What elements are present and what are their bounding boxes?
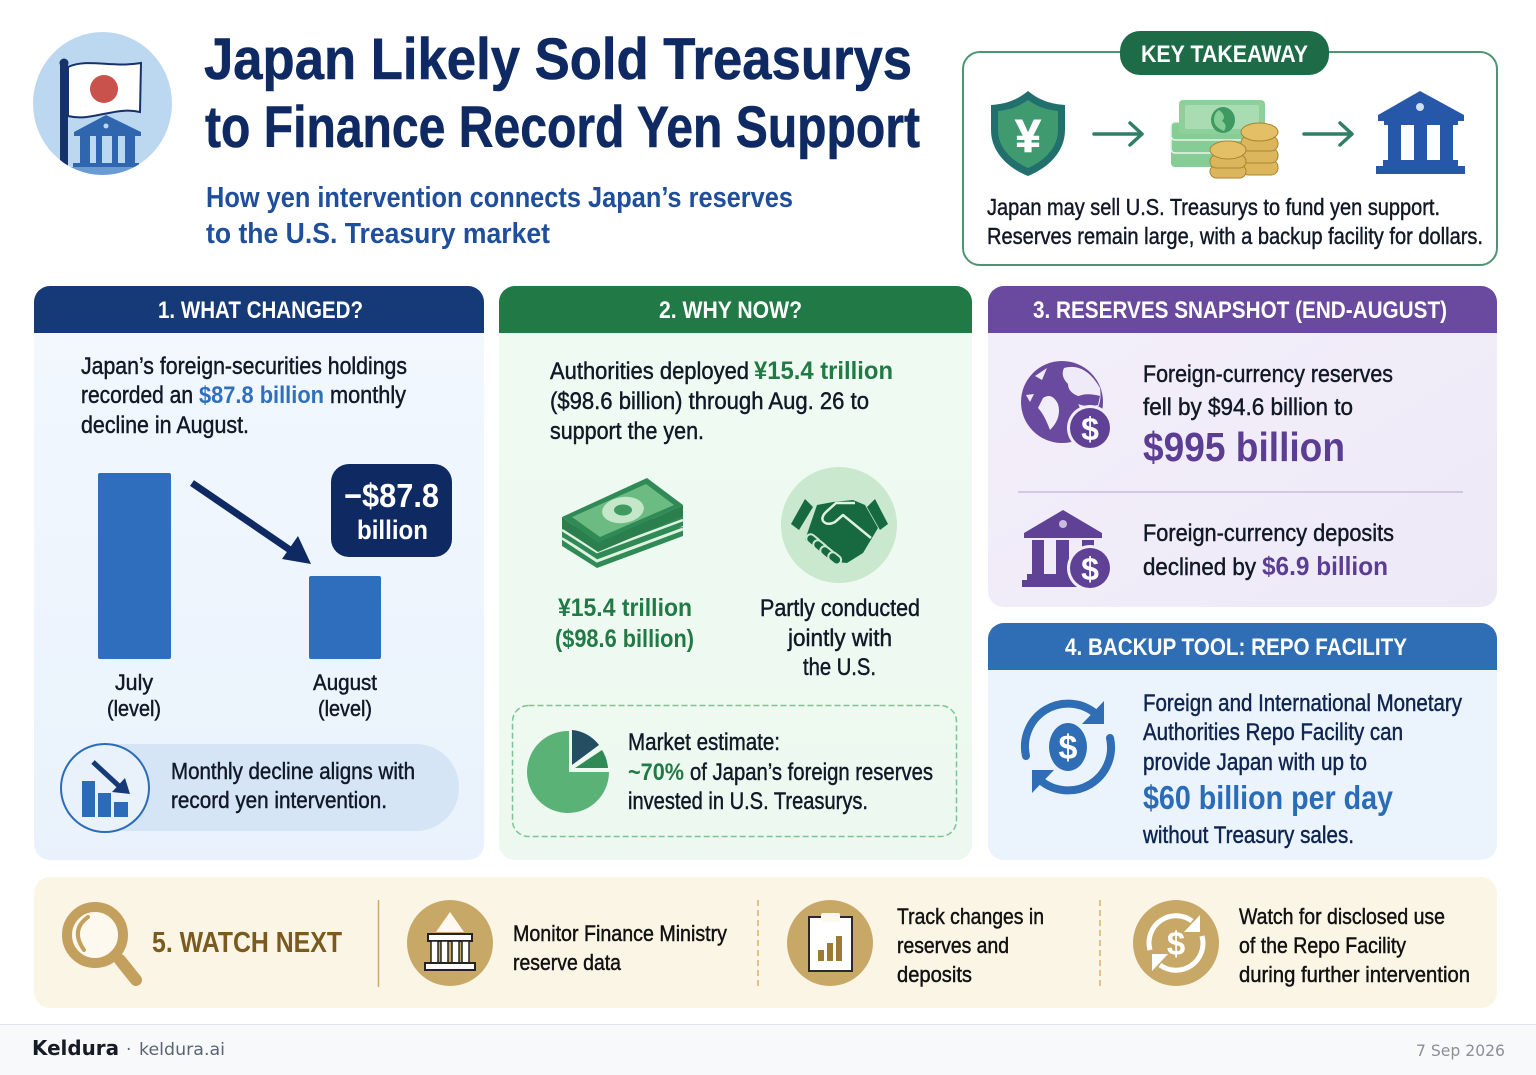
panel 3: reserves snapshot	[988, 286, 1497, 607]
panel 2 text	[550, 357, 893, 445]
panel 1 header: 1. WHAT CHANGED?	[158, 297, 363, 324]
panel 4 header: 4. BACKUP TOOL: REPO FACILITY	[1065, 634, 1407, 661]
icon: treasury building	[1376, 91, 1465, 174]
footer: keldura.ai	[139, 1040, 225, 1060]
bar chart: July vs August holdings: (level)	[318, 696, 372, 721]
text: jointly with U.S.	[760, 595, 920, 681]
item: watch repo facility: during further intervention	[1239, 962, 1470, 987]
item: monitor data: Monitor Finance Ministry	[513, 921, 728, 946]
panel 5: watch next	[34, 877, 1497, 1008]
subtitle: How yen intervention connects Japan’s reserves	[206, 182, 793, 214]
item: track changes: reserves and	[897, 933, 1009, 958]
panel 1 text	[81, 353, 407, 439]
text: foreign-currency deposits: declined by	[1143, 554, 1256, 581]
icon: globe with dollar: $	[1081, 411, 1099, 447]
title: to Finance Record Yen Support	[205, 95, 920, 160]
footer	[0, 1024, 1536, 1075]
panel 1 header	[34, 286, 484, 333]
pie chart: 70 percent in Treasurys	[527, 730, 609, 813]
callout: monthly decline aligns: record yen intervention.	[171, 787, 387, 813]
item: track changes: Track changes in	[897, 904, 1044, 929]
panel 4 header	[988, 623, 1497, 670]
text: foreign-currency reserves	[1143, 361, 1393, 470]
stat: yen amount	[555, 594, 694, 653]
panel 3 header: 3. RESERVES SNAPSHOT (END-AUGUST)	[1033, 297, 1447, 324]
title	[204, 27, 920, 160]
callout: market estimate: Market estimate:	[628, 729, 780, 756]
icon: globe with dollar	[1021, 361, 1113, 451]
icon: yen shield	[991, 91, 1065, 176]
text: jointly with U.S.: Partly conducted	[760, 595, 920, 622]
panel 2: why now	[499, 286, 972, 860]
arrow	[1304, 123, 1352, 145]
item: monitor data	[407, 900, 728, 986]
text: repo facility: $60 billion per day	[1143, 779, 1394, 816]
footer: ·	[126, 1040, 131, 1060]
panel 3 header	[988, 286, 1497, 333]
item: watch repo facility: of the Repo Facility	[1239, 933, 1407, 958]
stat: yen amount: ¥15.4 trillion	[558, 594, 692, 622]
subtitle	[206, 182, 793, 250]
panel 1 text: $87.8 billion	[199, 382, 324, 409]
icon: yen shield: ¥	[1015, 110, 1041, 162]
item: monitor data: reserve data	[513, 950, 621, 975]
callout: monthly decline aligns: Monthly decline aligns with	[171, 758, 415, 784]
callout: minus 87.8 billion	[331, 464, 452, 557]
panel 2 header	[499, 286, 972, 333]
icon: circular dollar flow	[1025, 701, 1111, 793]
panel 2 text: support the yen.	[550, 418, 704, 445]
takeaway text: Japan may sell U.S. Treasurys to fund yen support.	[987, 194, 1440, 220]
bar chart: July vs August holdings: (level)	[107, 696, 161, 721]
text: foreign-currency reserves: Foreign-currency reserves	[1143, 361, 1393, 388]
text: foreign-currency deposits: Foreign-currency deposits	[1143, 520, 1394, 547]
heading: watch next: 5. WATCH NEXT	[152, 927, 342, 959]
panel 4: repo facility	[988, 623, 1497, 860]
key takeaway badge: KEY TAKEAWAY	[1141, 41, 1308, 68]
panel 2 text: ($98.6 billion) through Aug. 26 to	[550, 388, 869, 415]
callout: monthly decline aligns	[61, 744, 459, 832]
arrow: decline	[192, 483, 311, 564]
text: repo facility: Foreign and International Monetary	[1143, 690, 1462, 717]
panel: key takeaway	[963, 31, 1497, 265]
text: foreign-currency deposits: $6.9 billion	[1262, 551, 1388, 581]
callout: market estimate: of Japan’s foreign reserves	[690, 759, 933, 786]
callout: market estimate: ~70%	[628, 759, 684, 786]
text: repo facility	[1142, 690, 1462, 849]
icon: bank with dollar: $	[1081, 551, 1099, 587]
text: repo facility: provide Japan with up to	[1143, 749, 1367, 776]
callout: market estimate: invested in U.S. Treasurys.	[628, 788, 868, 815]
key takeaway badge	[1120, 31, 1329, 75]
icon: bank with dollar	[1022, 510, 1113, 591]
item: track changes: deposits	[897, 962, 972, 987]
item: watch repo facility	[1133, 900, 1470, 987]
panel 2 text: Authorities deployed	[550, 358, 749, 385]
footer: 7 Sep 2026	[1416, 1041, 1505, 1060]
footer: Keldura	[32, 1036, 119, 1060]
icon: stack of banknotes	[562, 478, 683, 568]
bar chart: July vs August holdings: July	[115, 670, 153, 695]
text: foreign-currency reserves: $995 billion	[1143, 424, 1345, 470]
bar chart: July vs August holdings	[98, 473, 381, 721]
text: foreign-currency deposits	[1143, 520, 1394, 581]
panel 1 text: monthly	[330, 382, 406, 409]
panel 2 text: ¥15.4 trillion	[754, 357, 893, 385]
item: watch repo facility: $	[1167, 925, 1185, 962]
title: Japan Likely Sold Treasurys	[204, 27, 912, 92]
panel 2 header: 2. WHY NOW?	[659, 297, 802, 324]
callout: minus 87.8 billion: billion	[357, 515, 428, 545]
icon: cash and coins	[1171, 100, 1278, 178]
text: jointly with U.S.: jointly with	[787, 625, 892, 652]
panel 1 text: Japan’s foreign-securities holdings	[81, 353, 407, 380]
icon: magnifying glass	[67, 907, 136, 980]
stat: yen amount: ($98.6 billion)	[555, 625, 694, 653]
arrow	[1094, 123, 1142, 145]
panel 1 text: recorded an	[81, 382, 193, 409]
takeaway text	[987, 194, 1483, 249]
icon: handshake	[781, 467, 897, 583]
callout: market estimate	[512, 706, 956, 836]
bar chart: July vs August holdings: August	[313, 670, 377, 695]
icon: declining bars	[61, 744, 149, 832]
panel 1 text: decline in August.	[81, 412, 249, 439]
panel 1: what changed	[34, 286, 484, 860]
icon: Japanese flag and central bank	[33, 32, 172, 177]
text: foreign-currency reserves: fell by $94.6 billion to	[1143, 394, 1353, 421]
icon: circular dollar flow: $	[1059, 729, 1078, 767]
callout: minus 87.8 billion: −$87.8	[344, 477, 439, 514]
text: repo facility: without Treasury sales.	[1142, 822, 1354, 849]
item: track changes	[787, 900, 1044, 987]
text: jointly with U.S.: the U.S.	[803, 654, 876, 681]
item: watch repo facility: Watch for disclosed use	[1239, 904, 1445, 929]
text: repo facility: Authorities Repo Facility can	[1143, 719, 1403, 746]
subtitle: to the U.S. Treasury market	[206, 218, 550, 250]
